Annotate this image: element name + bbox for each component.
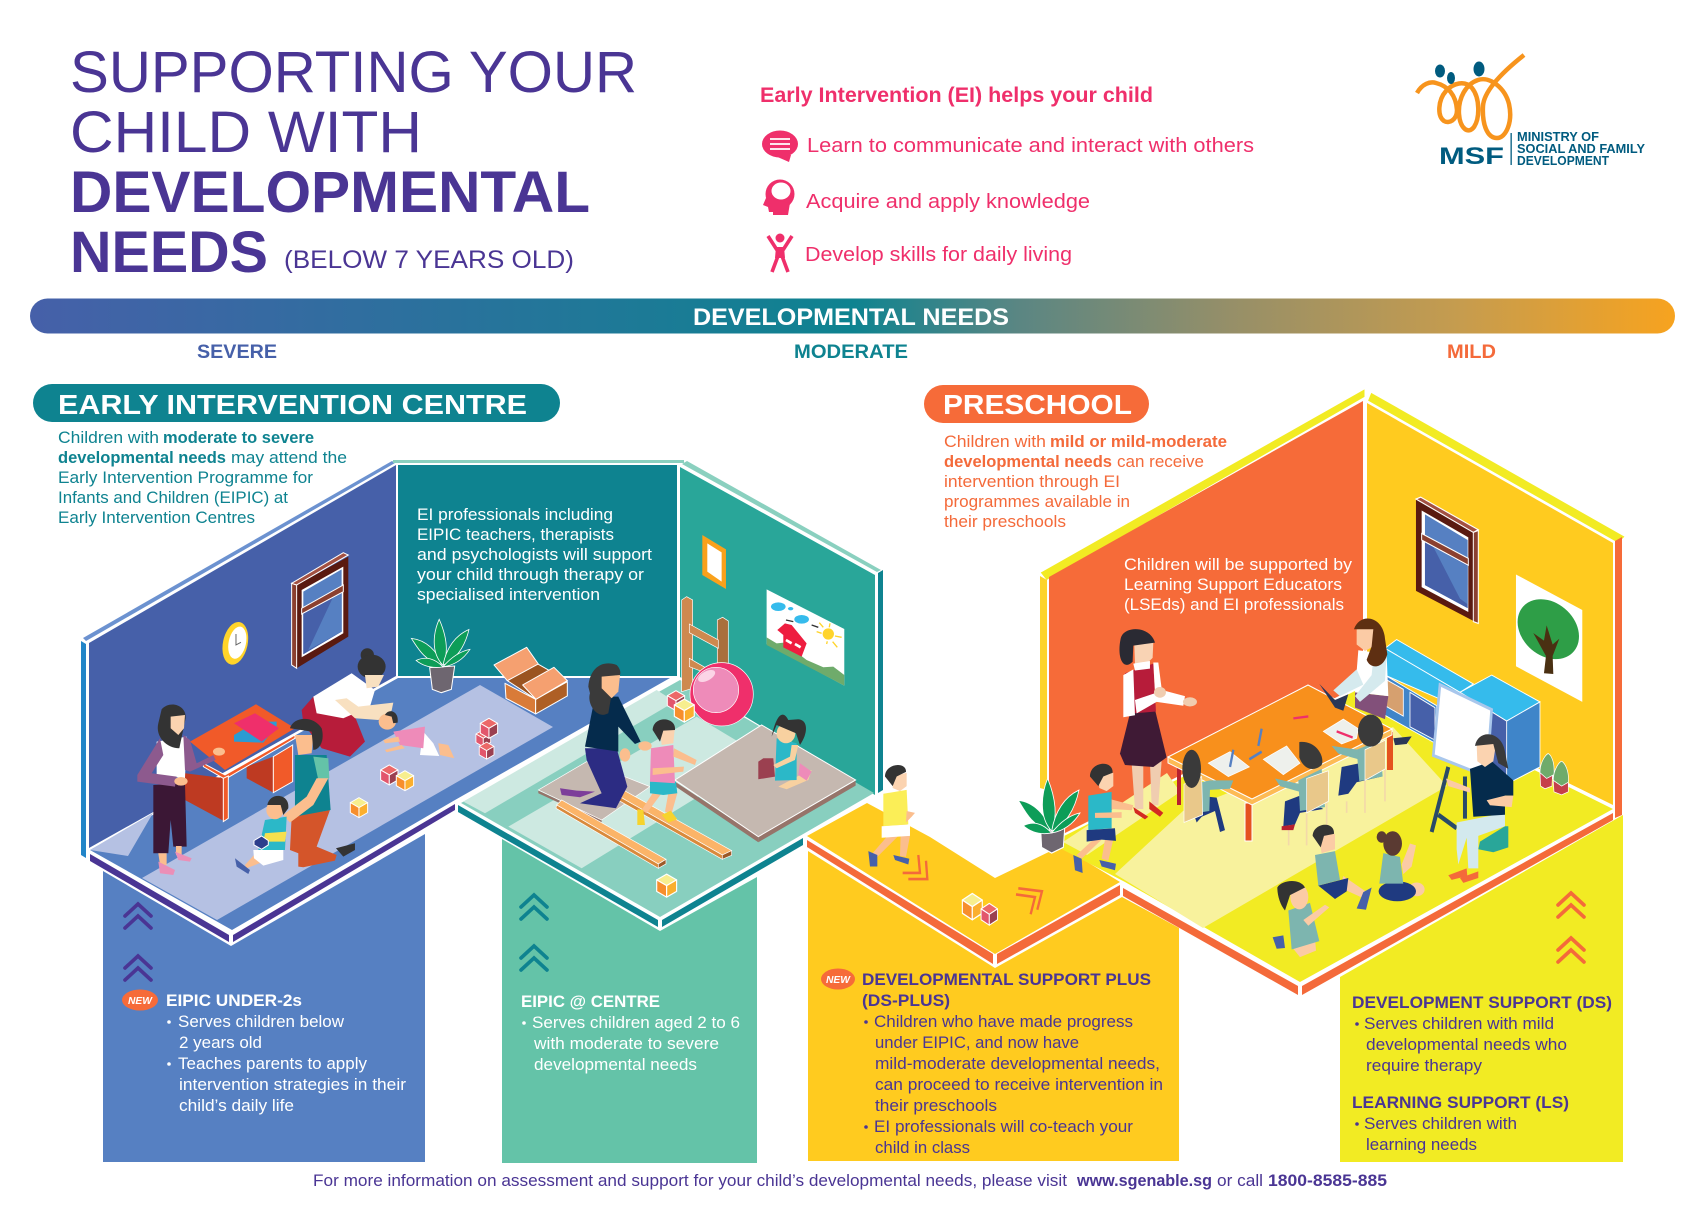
room: early intervention centre left: [81, 461, 670, 942]
person: kneeling therapist: [560, 663, 652, 808]
text: EIPIC at centre details: [521, 993, 740, 1074]
plant: centre: [411, 619, 470, 693]
severity scale labels: [197, 342, 1496, 363]
text: preschool intro: can receive: [1117, 453, 1204, 471]
early intervention benefits list: Develop skills for daily living: [805, 244, 1072, 266]
books and pencils: [1208, 716, 1358, 777]
text: EI professionals: EIPIC teachers, therapists: [417, 526, 614, 544]
plant: preschool entry: [1018, 778, 1080, 853]
text: DS-Plus details: mild-moderate developmental needs,: [875, 1055, 1160, 1073]
text: early intervention intro: Early Intervention Centres: [58, 509, 255, 527]
developmental needs gradient bar: DEVELOPMENTAL NEEDS: [693, 304, 1009, 331]
title: NEEDS: [70, 220, 268, 285]
panel: development and learning support: [1340, 815, 1623, 1162]
box: [494, 647, 567, 714]
icon: up chevrons: [125, 904, 151, 980]
mats: [538, 725, 856, 842]
text: early intervention intro: may attend the: [231, 449, 347, 467]
text: EIPIC under-2s details: EIPIC UNDER-2s: [166, 992, 302, 1010]
text: DS and LS details: developmental needs who: [1366, 1036, 1567, 1054]
text: DS and LS details: LEARNING SUPPORT (LS): [1352, 1094, 1569, 1112]
person: crawling baby: [379, 711, 454, 758]
icon: head: [763, 180, 794, 215]
title: CHILD WITH: [70, 100, 422, 165]
text: early intervention intro: [58, 429, 347, 527]
text: EI professionals: EI professionals including: [417, 506, 613, 524]
text: preschool intro: their preschools: [944, 513, 1066, 531]
text: learning support educators: [1124, 556, 1353, 614]
person: sitting girl from back: [1377, 831, 1425, 901]
person: child at table 1: [1182, 750, 1233, 832]
text: EIPIC at centre details: developmental needs: [534, 1056, 697, 1074]
icon: house painting: [767, 589, 844, 686]
table with books: [185, 704, 295, 822]
person: toddler with block: [235, 796, 288, 874]
text: DS-Plus details: their preschools: [875, 1097, 997, 1115]
text: DS and LS details: DEVELOPMENT SUPPORT (DS): [1352, 994, 1612, 1012]
footer: [313, 1172, 1387, 1190]
panel: EIPIC under-2s: [103, 834, 425, 1162]
person: sitting pigtail girl: [1273, 881, 1329, 957]
footer: For more information on assessment and support for your child’s developmental needs, please visit: [313, 1172, 1067, 1190]
text: preschool intro: developmental needs: [944, 453, 1112, 471]
exercise ball: [690, 663, 753, 726]
footer: or call: [1217, 1172, 1263, 1190]
text: EI professionals: specialised intervention: [417, 586, 600, 604]
preschool table and kids: [1168, 618, 1568, 957]
whiteboard: [1432, 685, 1492, 832]
text: preschool intro: intervention through EI: [944, 473, 1120, 491]
early intervention benefits list: Early Intervention (EI) helps your child: [760, 84, 1153, 107]
potted plants: [1540, 754, 1568, 795]
icon: up chevrons: [1558, 893, 1584, 962]
room 1 furnishings and people: [137, 553, 498, 875]
text: EIPIC at centre details: EIPIC @ CENTRE: [521, 993, 660, 1011]
logo: MSF: DEVELOPMENT: [1517, 153, 1609, 168]
person: child at table 2: [1275, 742, 1328, 845]
title: SUPPORTING YOUR: [70, 40, 637, 105]
floor: preschool and connecting path: [807, 686, 1613, 995]
text: EIPIC under-2s details: [166, 992, 407, 1115]
text: EI professionals: [417, 506, 652, 604]
logo: MSF: SOCIAL AND FAMILY: [1517, 141, 1645, 156]
icon: person: [768, 234, 792, 272]
person: teacher in red vest: [1119, 629, 1197, 819]
text: DS-Plus details: Children who have made progress: [874, 1013, 1133, 1031]
text: learning support educators: Learning Support Educators: [1124, 576, 1342, 594]
text: EI professionals: and psychologists will support: [417, 546, 652, 564]
text: learning support educators: (LSEds) and EI professionals: [1124, 596, 1344, 614]
early intervention benefits list: Acquire and apply knowledge: [806, 191, 1090, 213]
blocks: [962, 893, 998, 925]
text: DS-Plus details: [862, 971, 1163, 1157]
badge: new: NEW: [128, 996, 154, 1007]
text: preschool intro: Children with: [944, 433, 1046, 451]
text: DS-Plus details: child in class: [875, 1139, 970, 1157]
text: DS and LS details: Serves children with: [1364, 1115, 1517, 1133]
heading: preschool: PRESCHOOL: [943, 389, 1132, 420]
icon: window: [1416, 497, 1478, 623]
person: sitting girl: [758, 715, 812, 789]
text: EIPIC under-2s details: Serves children below: [178, 1013, 344, 1031]
panel: EIPIC at centre: [502, 839, 757, 1163]
person: sitting boy: [1313, 825, 1372, 910]
developmental needs gradient bar: [30, 298, 1675, 334]
text: DS and LS details: Serves children with mild: [1364, 1015, 1554, 1033]
text: EIPIC under-2s details: intervention strategies in their: [179, 1076, 407, 1094]
balance beams: [556, 790, 732, 868]
room: early intervention centre back wall: [393, 460, 883, 795]
panel: developmental support plus: [808, 851, 1179, 1161]
text: early intervention intro: Children with: [58, 429, 159, 447]
person: kneeling parent: [283, 719, 355, 867]
heading: early intervention centre: [33, 384, 560, 422]
badge: new: NEW: [826, 975, 852, 986]
cabinets: [1385, 640, 1540, 784]
person: woman with baby: [302, 648, 393, 757]
early intervention benefits list: [760, 84, 1254, 272]
person: child at table 3: [1332, 715, 1385, 813]
text: EIPIC under-2s details: 2 years old: [179, 1034, 262, 1052]
person: standing therapist: [137, 705, 225, 875]
room: preschool walls: [1040, 392, 1622, 841]
text: DS and LS details: learning needs: [1366, 1136, 1477, 1154]
room 2 furnishings and people: [494, 535, 856, 897]
text: preschool intro: [944, 433, 1227, 531]
text: preschool intro: mild or mild-moderate: [1050, 433, 1227, 451]
text: EIPIC under-2s details: Teaches parents to apply: [178, 1055, 368, 1073]
text: EIPIC under-2s details: child’s daily life: [179, 1097, 294, 1115]
text: EIPIC at centre details: Serves children aged 2 to 6: [532, 1014, 740, 1032]
early intervention benefits list: Learn to communicate and interact with others: [807, 135, 1254, 157]
text: preschool intro: programmes available in: [944, 493, 1130, 511]
text: EI professionals: your child through therapy or: [417, 566, 645, 584]
heading: preschool: [924, 385, 1149, 423]
table: [1168, 685, 1393, 841]
title: DEVELOPMENTAL: [70, 160, 590, 225]
icon: path arrows: [903, 855, 1042, 914]
text: DS-Plus details: can proceed to receive intervention in: [875, 1076, 1163, 1094]
text: learning support educators: Children will be supported by: [1124, 556, 1353, 574]
person: boy in blue: [1073, 764, 1133, 873]
icon: up chevrons: [521, 895, 547, 970]
text: early intervention intro: developmental needs: [58, 449, 226, 467]
wall objects and cabinets in preschool: [1385, 497, 1588, 784]
title: [70, 40, 637, 285]
text: EIPIC at centre details: with moderate to severe: [533, 1035, 719, 1053]
logo: MSF: MINISTRY OF: [1517, 129, 1599, 144]
icon: tree poster: [1508, 574, 1588, 702]
logo: MSF: MSF: [1439, 143, 1504, 170]
logo: MSF: [1417, 55, 1645, 170]
text: DS-Plus details: EI professionals will co-teach your: [874, 1118, 1134, 1136]
text: DS-Plus details: (DS-PLUS): [862, 992, 950, 1010]
icon: wall ladder: [682, 597, 728, 692]
footer: www.sgenable.sg: [1076, 1172, 1212, 1190]
person: seated teacher with book: [1319, 618, 1412, 745]
badge: new: [821, 968, 855, 990]
text: early intervention intro: Infants and Children (EIPIC) at: [58, 489, 288, 507]
icon: empty frame: [702, 535, 726, 589]
blocks: [657, 691, 694, 897]
heading: early intervention centre: EARLY INTERVENTION CENTRE: [58, 389, 527, 420]
text: DS-Plus details: DEVELOPMENTAL SUPPORT PLUS: [862, 971, 1151, 989]
text: DS and LS details: [1352, 994, 1612, 1154]
title: (BELOW 7 YEARS OLD): [284, 246, 574, 274]
blocks: [350, 718, 498, 818]
severity scale labels: SEVERE: [197, 342, 277, 363]
icon: clock: [219, 620, 252, 667]
text: DS-Plus details: under EIPIC, and now have: [875, 1034, 1079, 1052]
text: DS and LS details: require therapy: [1366, 1057, 1483, 1075]
text: early intervention intro: moderate to severe: [163, 429, 314, 447]
room: therapy floor: [458, 680, 874, 927]
icon: speech bubble: [762, 130, 798, 162]
person: teacher at whiteboard: [1446, 734, 1513, 883]
icon: window: [292, 553, 348, 668]
text: early intervention intro: Early Intervention Programme for: [58, 469, 314, 487]
person: child on beam: [637, 719, 697, 825]
severity scale labels: MILD: [1447, 342, 1496, 363]
badge: new: [122, 990, 158, 1010]
person: boy in yellow: [868, 765, 915, 866]
path people and objects: [868, 629, 1197, 925]
footer: 1800-8585-885: [1268, 1172, 1387, 1190]
severity scale labels: MODERATE: [794, 342, 908, 363]
